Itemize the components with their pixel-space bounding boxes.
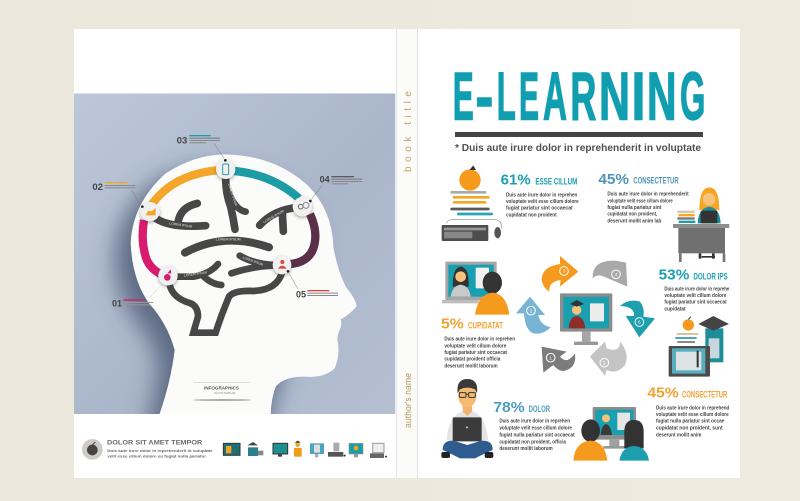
stat: 45% consectetur orange: 45% — [647, 386, 679, 402]
stat: 45% consectetur orange: Duis aute irure dolor in reprehend — [656, 405, 729, 411]
book spine — [396, 29, 418, 478]
callout 02 — [92, 182, 144, 208]
footer apple icon — [82, 439, 103, 460]
stat: 5% cupidatat: fugiat pariatur sint occaecat — [444, 350, 507, 356]
stat: 45% consectetur orange: fugiat nulla pariatur sint occae — [656, 419, 724, 425]
stat: 78% dolor: cupidatat non proident, officia — [499, 439, 566, 445]
stat: 5% cupidatat: deserunt mollit laborum — [444, 363, 498, 369]
track labels: LOREM IPSUM — [262, 209, 285, 224]
icon: two viewers at monitor — [573, 407, 649, 461]
stat: 5% cupidatat: cupidatat proident officia — [444, 357, 500, 363]
title: L — [497, 58, 516, 134]
footer icon row — [223, 441, 387, 458]
footer strip — [82, 439, 387, 460]
track labels: LOREM IPSUM — [169, 221, 193, 229]
stat: 78% dolor: voluptate velit esse cillum dolore — [499, 425, 572, 431]
stat: 61% esse cillum: 61% — [501, 173, 531, 189]
stat: 53% dolor ips: voluptate velit cillum dolore — [664, 293, 726, 299]
stat: 61% esse cillum: cupidatat non proident — [506, 212, 557, 218]
stat: 78% dolor: Duis aute irure dolor in reprehen — [499, 419, 570, 425]
node: person — [273, 256, 291, 274]
icon: graduate on monitor — [560, 293, 612, 345]
stat: 45% consectetur: CONSECTETUR — [633, 176, 679, 186]
stat: 53% dolor ips: cupidatat — [664, 306, 686, 312]
stat: 53% dolor ips: DOLOR IPS — [693, 271, 728, 281]
brain tracks — [156, 178, 299, 333]
stat: 78% dolor: fugiat nulla pariatur sint occaecat — [499, 432, 575, 438]
title: A — [543, 58, 567, 134]
stat: 5% cupidatat — [441, 317, 515, 369]
stat: 61% esse cillum: Duis aute irure dolor in reprehen — [506, 192, 577, 198]
footer description: Duis aute irure dolor in reprehenderit in voluptate — [107, 449, 213, 453]
stat: 45% consectetur: deserunt mollit anim lab — [607, 219, 662, 225]
stat: 45% consectetur orange: deserunt mollit anim — [656, 432, 702, 438]
callout 01: 01 — [112, 299, 122, 309]
footer description: velit esse cillum dolore eu fugiat nulla pariatur — [107, 455, 207, 459]
callout 05 — [287, 270, 338, 299]
arrow 3 orange: 3 — [563, 269, 566, 274]
arrow 4 gray: 4 — [615, 272, 618, 277]
head silhouette — [131, 154, 356, 418]
node: chart — [140, 202, 160, 221]
arrow 2 light blue: 2 — [530, 308, 533, 313]
track labels: LOREM IPSUM — [216, 238, 241, 242]
stat: 45% consectetur: Duis aute irure dolor in reprehenderit — [607, 192, 689, 198]
stat: 53% dolor ips: fugiat pariatur sint occaecat — [664, 300, 727, 306]
arrow 6 teal: 6 — [638, 320, 641, 325]
stat: 45% consectetur: cupidatat non proident, — [607, 212, 658, 218]
stat: 78% dolor: 78% — [493, 400, 525, 416]
stat: 45% consectetur — [598, 172, 689, 225]
footer description — [107, 449, 213, 459]
stat: 78% dolor — [493, 400, 575, 452]
stat: 53% dolor ips — [659, 267, 729, 312]
coloured rim arcs — [143, 170, 315, 275]
node: magenta symbol — [158, 266, 178, 285]
stat: 5% cupidatat: 5% — [441, 317, 464, 333]
callout 04: 04 — [320, 175, 330, 185]
spine author name: author's name — [403, 373, 414, 428]
panel: head illustration — [74, 94, 396, 414]
title: E — [453, 58, 474, 134]
stat: 61% esse cillum — [501, 173, 579, 218]
stat: 53% dolor ips: 53% — [659, 267, 689, 283]
stat: 45% consectetur: fugiat nulla pariatur sint — [607, 205, 662, 211]
stat: 45% consectetur orange — [647, 386, 729, 438]
callout 03 — [177, 135, 227, 162]
track labels: LOREM IPSUM — [227, 183, 238, 207]
stat: 45% consectetur orange: voluptate velit esse cillum dolore — [656, 412, 729, 418]
stat: 45% consectetur: voluptate velit esse cillum dolore — [607, 198, 673, 204]
arrow 5 light gray: 5 — [603, 360, 606, 365]
title: - — [475, 58, 493, 134]
track labels: LOREM IPSUM — [242, 256, 264, 267]
book back cover — [74, 29, 396, 478]
node: phone — [216, 160, 235, 179]
stat: 45% consectetur orange: CONSECTETUR — [682, 390, 727, 400]
title: N — [599, 58, 630, 134]
stat: 78% dolor: deserunt mollit laborum — [499, 446, 553, 452]
infographics caption: INFOGRAPHICS — [204, 386, 239, 391]
title rule — [455, 132, 703, 137]
head shadow — [101, 154, 296, 414]
footer heading: DOLOR SIT AMET TEMPOR — [107, 439, 203, 446]
track labels — [169, 183, 285, 278]
callout 05: 05 — [296, 289, 306, 299]
title: I — [632, 58, 646, 134]
callout 03: 03 — [177, 135, 187, 145]
stat: 5% cupidatat: CUPIDATAT — [468, 321, 503, 331]
lower content — [441, 316, 729, 461]
title: N — [647, 58, 676, 134]
infographics caption: VECTOR TEMPLATE — [214, 391, 236, 395]
stat: 53% dolor ips: Duis aute irure dolor in reprehe — [664, 286, 729, 292]
title: E — [519, 58, 539, 134]
subtitle: * Duis aute irure dolor in reprehenderit in voluptate — [455, 142, 701, 154]
callout 04 — [309, 175, 362, 202]
icon: apple on books and keyboard — [442, 165, 502, 241]
stat: 78% dolor: DOLOR — [529, 404, 550, 414]
stat: 5% cupidatat: Duis aute irure dolor in reprehen — [444, 337, 515, 343]
arrow 1 dark gray: 1 — [549, 355, 552, 360]
stat: 45% consectetur orange: cupidatat non proident, sunt — [656, 425, 723, 431]
track labels: LOREM IPSUM — [184, 270, 207, 278]
stat: 45% consectetur: 45% — [598, 172, 629, 188]
spine book title: book title — [403, 89, 414, 172]
icon: video call laptop — [442, 262, 509, 315]
stat: 61% esse cillum: voluptate velit esse cillum dolore — [506, 199, 579, 205]
icon: man with laptop — [441, 379, 493, 458]
title — [453, 58, 705, 134]
upper content — [442, 165, 729, 315]
callout 02: 02 — [92, 182, 103, 192]
stat: 61% esse cillum: ESSE CILLUM — [535, 176, 577, 186]
icon: apple books tablet cap — [669, 316, 729, 377]
infographics caption — [193, 382, 252, 401]
book front cover: G — [680, 58, 705, 134]
node: gears — [293, 197, 312, 216]
callout 01 — [112, 285, 161, 309]
stat: 61% esse cillum: fugiat pariatur sint occaecat — [506, 206, 573, 212]
title: R — [570, 58, 596, 134]
stat: 5% cupidatat: voluptate velit cillum dolore — [444, 343, 506, 349]
book front cover — [418, 29, 740, 478]
icon: teacher at desk — [673, 187, 729, 262]
lifecycle arrows and monitor — [516, 256, 655, 376]
